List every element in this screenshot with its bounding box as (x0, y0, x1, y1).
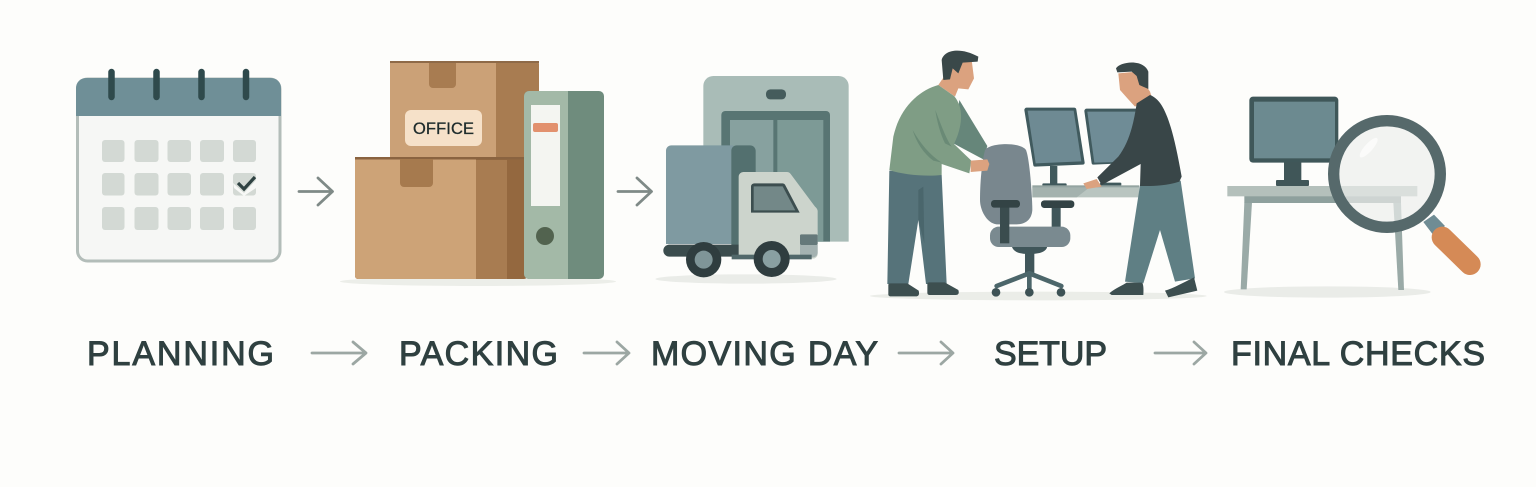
person left (887, 51, 987, 296)
icon: calendar (76, 72, 281, 261)
desk (1227, 186, 1417, 290)
binder (524, 91, 604, 279)
label: moving day: MOVING DAY (651, 335, 878, 373)
arrow: calendar to boxes (299, 178, 332, 205)
label: setup: SETUP (994, 335, 1107, 373)
box label text: OFFICE (413, 120, 474, 138)
office chair (971, 144, 1074, 297)
monitor (1249, 97, 1338, 186)
label: packing: PACKING (399, 335, 558, 373)
elevator (703, 76, 849, 242)
arrow: packing to moving day (584, 342, 629, 364)
label: final checks: FINAL CHECKS (1231, 335, 1485, 373)
arrow: planning to packing (312, 342, 366, 364)
person right (1083, 62, 1197, 297)
truck (663, 145, 818, 277)
icon: desk and magnifying glass (1224, 97, 1470, 298)
scene: two people setting up a workstation (870, 51, 1207, 300)
icon: cardboard boxes and binder (340, 61, 616, 286)
icon: truck and elevator (655, 76, 849, 284)
arrow: setup to final checks (1155, 342, 1206, 364)
bottom box (355, 157, 527, 279)
hand on chair (971, 159, 989, 172)
desk (1032, 185, 1139, 197)
arrow: moving day to setup (899, 342, 953, 364)
magnifying glass (1334, 121, 1470, 264)
monitors (1024, 108, 1140, 187)
label: planning: PLANNING (87, 335, 274, 373)
arrow: boxes to truck (618, 178, 652, 205)
top box (390, 61, 539, 161)
